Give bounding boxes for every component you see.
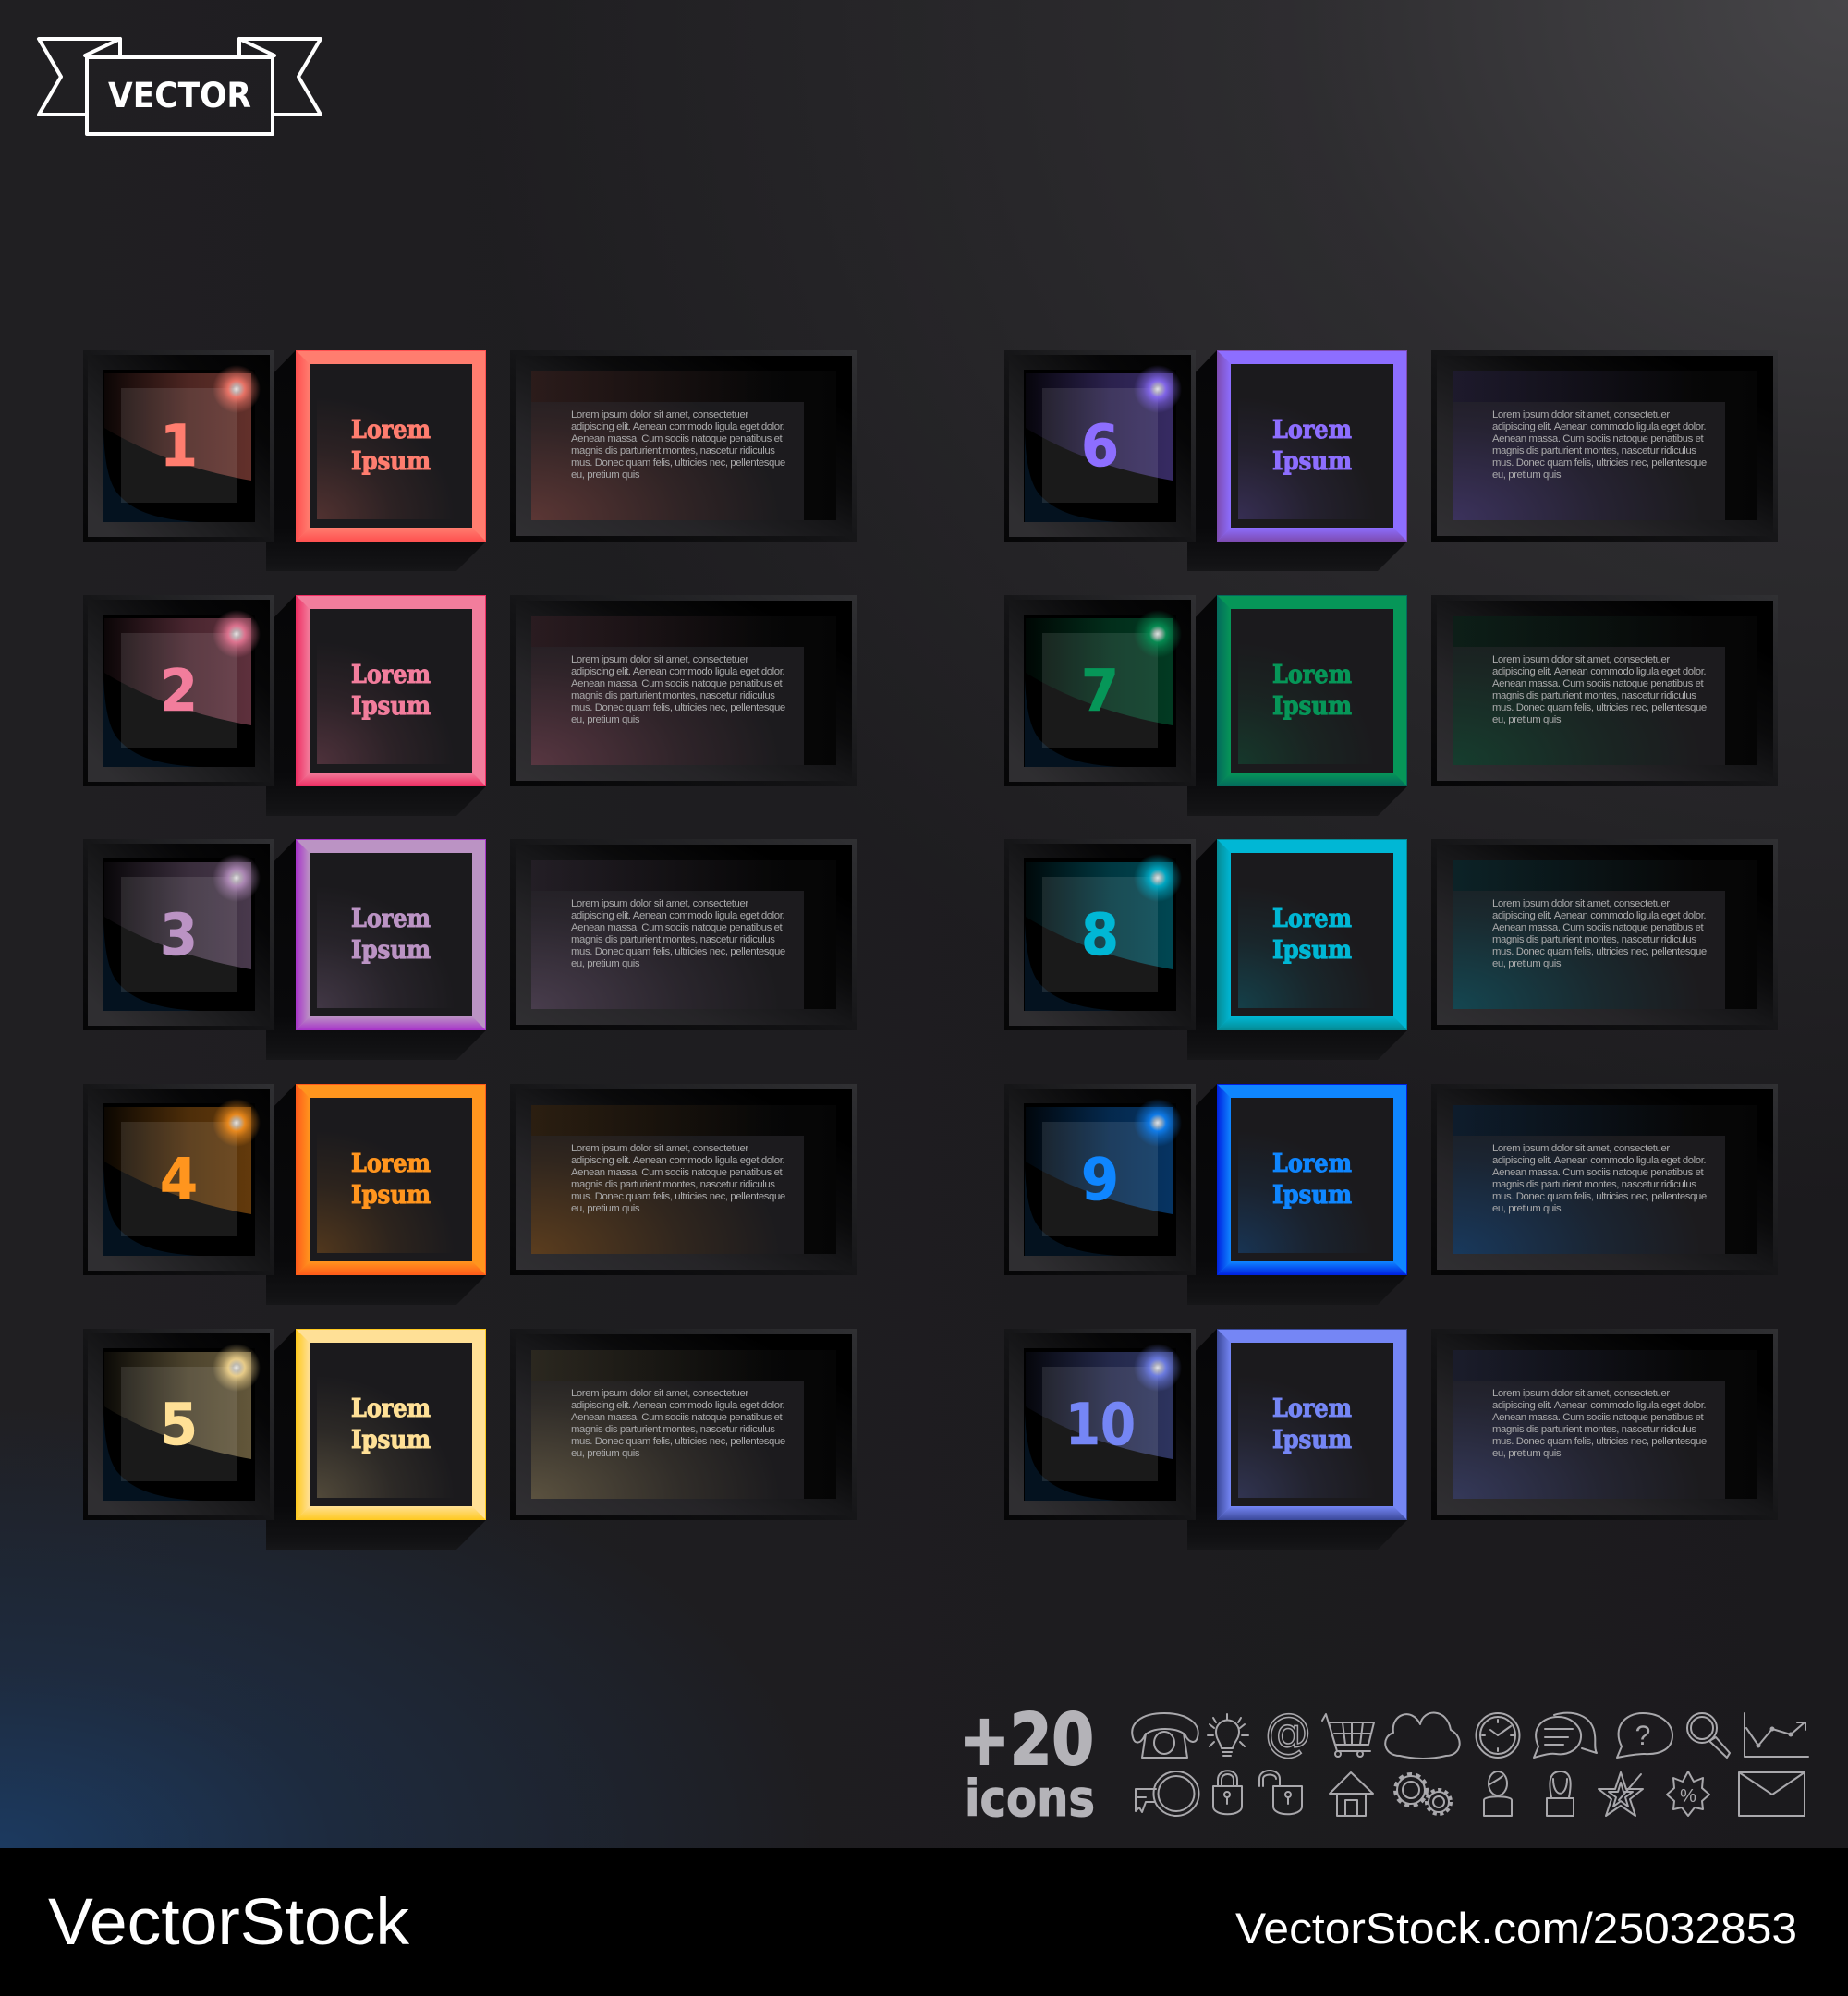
title frame 8 xyxy=(1217,839,1407,1030)
title frame 9: Lorem xyxy=(1272,1150,1352,1178)
title frame 3: Lorem xyxy=(351,905,431,933)
text panel 8: mus. Donec quam felis, ultricies nec, pellentesque xyxy=(1492,946,1707,957)
text panel 7: eu, pretium quis xyxy=(1492,714,1561,725)
icon: cloud xyxy=(1385,1713,1460,1759)
text panel 1: eu, pretium quis xyxy=(571,469,639,481)
text panel 4: Aenean massa. Cum sociis natoque penatibus et xyxy=(571,1167,782,1178)
text panel 6: eu, pretium quis xyxy=(1492,469,1561,481)
text panel 7: adipiscing elit. Aenean commodo ligula eget dolor. xyxy=(1492,666,1706,677)
text panel 2: Aenean massa. Cum sociis natoque penatibus et xyxy=(571,678,782,689)
icon: line chart xyxy=(1745,1713,1808,1757)
number tile 3: 3 xyxy=(160,901,198,968)
text panel 10: mus. Donec quam felis, ultricies nec, pellentesque xyxy=(1492,1436,1707,1447)
text panel 9: mus. Donec quam felis, ultricies nec, pellentesque xyxy=(1492,1191,1707,1202)
row 1: item 1 xyxy=(83,350,857,571)
title frame 2 xyxy=(296,595,486,786)
title frame 5: Ipsum xyxy=(351,1426,431,1454)
text panel 5: adipiscing elit. Aenean commodo ligula eget dolor. xyxy=(571,1400,784,1411)
text panel 10: eu, pretium quis xyxy=(1492,1448,1561,1459)
icon: gears xyxy=(1395,1774,1451,1814)
text panel 9: adipiscing elit. Aenean commodo ligula eget dolor. xyxy=(1492,1155,1706,1166)
title frame 3 xyxy=(296,839,486,1030)
number tile 2: 2 xyxy=(160,657,198,724)
icon: closed padlock xyxy=(1213,1771,1242,1814)
number tile 5: 5 xyxy=(160,1391,198,1458)
text panel 6: Lorem ipsum dolor sit amet, consectetuer xyxy=(1492,409,1670,420)
text panel 8 xyxy=(1431,839,1778,1030)
icon: woman xyxy=(1547,1771,1574,1816)
number tile 1 xyxy=(83,350,274,542)
text panel 4: Lorem ipsum dolor sit amet, consectetuer xyxy=(571,1143,748,1154)
logo: vector ribbon xyxy=(37,37,323,136)
text panel 8: magnis dis parturient montes, nascetur ridiculus xyxy=(1492,934,1696,945)
text panel 6 xyxy=(1431,350,1778,542)
row 8: item 8 xyxy=(1004,839,1778,1060)
text panel 2: eu, pretium quis xyxy=(571,714,639,725)
title frame 10: Ipsum xyxy=(1272,1426,1352,1454)
text panel 5: eu, pretium quis xyxy=(571,1448,639,1459)
text panel 1: mus. Donec quam felis, ultricies nec, pellentesque xyxy=(571,457,785,469)
text panel 10: adipiscing elit. Aenean commodo ligula eget dolor. xyxy=(1492,1400,1706,1411)
icon: at sign: @ xyxy=(1265,1703,1311,1761)
number tile 8: 8 xyxy=(1081,901,1119,968)
text panel 5 xyxy=(510,1329,857,1520)
row 3: item 3 xyxy=(83,839,857,1060)
heading: +20 icons: +20 xyxy=(959,1699,1094,1782)
number tile 4 xyxy=(83,1084,274,1275)
title frame 9: Ipsum xyxy=(1272,1181,1352,1210)
text panel 2: adipiscing elit. Aenean commodo ligula eget dolor. xyxy=(571,666,784,677)
text panel 8: Lorem ipsum dolor sit amet, consectetuer xyxy=(1492,898,1670,909)
title frame 2: Ipsum xyxy=(351,692,431,721)
number tile 5 xyxy=(83,1329,274,1520)
number tile 10: 10 xyxy=(1065,1391,1136,1458)
number tile 8 xyxy=(1004,839,1196,1030)
title frame 4 xyxy=(296,1084,486,1275)
icon: chat bubbles xyxy=(1534,1713,1597,1758)
footer url: VectorStock.com/25032853 xyxy=(1235,1904,1797,1953)
row 6: item 6 xyxy=(1004,350,1778,571)
text panel 3: mus. Donec quam felis, ultricies nec, pellentesque xyxy=(571,946,785,957)
text panel 2: magnis dis parturient montes, nascetur ridiculus xyxy=(571,690,775,701)
footer bar xyxy=(0,1848,1848,1996)
text panel 6: magnis dis parturient montes, nascetur ridiculus xyxy=(1492,445,1696,456)
row 5: item 5 xyxy=(83,1329,857,1550)
text panel 4: adipiscing elit. Aenean commodo ligula eget dolor. xyxy=(571,1155,784,1166)
title frame 8: Lorem xyxy=(1272,905,1352,933)
title frame 10: Lorem xyxy=(1272,1394,1352,1423)
title frame 6: Lorem xyxy=(1272,416,1352,444)
text panel 3: adipiscing elit. Aenean commodo ligula eget dolor. xyxy=(571,910,784,921)
row 2: item 2 xyxy=(83,595,857,816)
text panel 7: mus. Donec quam felis, ultricies nec, pellentesque xyxy=(1492,702,1707,713)
text panel 5: mus. Donec quam felis, ultricies nec, pellentesque xyxy=(571,1436,785,1447)
text panel 4 xyxy=(510,1084,857,1275)
text panel 8: adipiscing elit. Aenean commodo ligula eget dolor. xyxy=(1492,910,1706,921)
text panel 4: mus. Donec quam felis, ultricies nec, pellentesque xyxy=(571,1191,785,1202)
text panel 9 xyxy=(1431,1084,1778,1275)
heading: +20 icons: icons xyxy=(965,1770,1095,1828)
text panel 9: eu, pretium quis xyxy=(1492,1203,1561,1214)
title frame 6 xyxy=(1217,350,1407,542)
title frame 8: Ipsum xyxy=(1272,936,1352,965)
text panel 2: Lorem ipsum dolor sit amet, consectetuer xyxy=(571,654,748,665)
text panel 10: magnis dis parturient montes, nascetur ridiculus xyxy=(1492,1424,1696,1435)
text panel 7: Aenean massa. Cum sociis natoque penatibus et xyxy=(1492,678,1703,689)
icon: telephone xyxy=(1132,1713,1198,1758)
text panel 2 xyxy=(510,595,857,786)
title frame 5 xyxy=(296,1329,486,1520)
text panel 10: Lorem ipsum dolor sit amet, consectetuer xyxy=(1492,1388,1670,1399)
text panel 1: Lorem ipsum dolor sit amet, consectetuer xyxy=(571,409,748,420)
text panel 3: magnis dis parturient montes, nascetur ridiculus xyxy=(571,934,775,945)
text panel 6: Aenean massa. Cum sociis natoque penatibus et xyxy=(1492,433,1703,444)
icon: light bulb xyxy=(1208,1714,1248,1756)
logo: vector ribbon: VECTOR xyxy=(108,76,251,116)
icon: question bubble xyxy=(1617,1713,1672,1758)
number tile 6: 6 xyxy=(1081,412,1119,480)
title frame 1: Lorem xyxy=(351,416,431,444)
text panel 10 xyxy=(1431,1329,1778,1520)
number tile 1: 1 xyxy=(160,412,198,480)
text panel 10: Aenean massa. Cum sociis natoque penatibus et xyxy=(1492,1412,1703,1423)
row 10: item 10 xyxy=(1004,1329,1778,1547)
icon: man xyxy=(1484,1771,1512,1816)
icon: house xyxy=(1330,1772,1373,1816)
icon: magnifier xyxy=(1687,1713,1730,1758)
row 7: item 7 xyxy=(1004,595,1778,816)
title frame 7: Lorem xyxy=(1272,661,1352,689)
heading: +20 icons xyxy=(959,1699,1095,1828)
text panel 1 xyxy=(510,350,857,542)
icon: envelope xyxy=(1739,1772,1805,1816)
text panel 3: eu, pretium quis xyxy=(571,958,639,969)
number tile 10 xyxy=(1004,1329,1196,1520)
number tile 7 xyxy=(1004,595,1196,786)
text panel 7 xyxy=(1431,595,1778,786)
text panel 1: Aenean massa. Cum sociis natoque penatibus et xyxy=(571,433,782,444)
title frame 9 xyxy=(1217,1084,1407,1275)
text panel 5: Aenean massa. Cum sociis natoque penatibus et xyxy=(571,1412,782,1423)
icon: question mark: ? xyxy=(1635,1721,1650,1751)
icon: clock xyxy=(1477,1713,1519,1758)
title frame 6: Ipsum xyxy=(1272,447,1352,476)
icon: shopping cart xyxy=(1322,1714,1374,1757)
icon: open padlock xyxy=(1259,1771,1302,1814)
text panel 9: magnis dis parturient montes, nascetur ridiculus xyxy=(1492,1179,1696,1190)
number tile 9: 9 xyxy=(1081,1146,1119,1213)
text panel 3: Lorem ipsum dolor sit amet, consectetuer xyxy=(571,898,748,909)
text panel 5: magnis dis parturient montes, nascetur ridiculus xyxy=(571,1424,775,1435)
row 4: item 4 xyxy=(83,1084,857,1305)
text panel 6: adipiscing elit. Aenean commodo ligula eget dolor. xyxy=(1492,421,1706,432)
number tile 9 xyxy=(1004,1084,1196,1275)
text panel 6: mus. Donec quam felis, ultricies nec, pellentesque xyxy=(1492,457,1707,469)
text panel 3 xyxy=(510,839,857,1030)
text panel 5: Lorem ipsum dolor sit amet, consectetuer xyxy=(571,1388,748,1399)
row 9: item 9 xyxy=(1004,1084,1778,1302)
text panel 9: Lorem ipsum dolor sit amet, consectetuer xyxy=(1492,1143,1670,1154)
number tile 2 xyxy=(83,595,274,786)
number tile 3 xyxy=(83,839,274,1030)
title frame 4: Lorem xyxy=(351,1150,431,1178)
title frame 7 xyxy=(1217,595,1407,786)
icon: star with check xyxy=(1599,1772,1643,1816)
icon: discount badge xyxy=(1667,1771,1709,1816)
title frame 2: Lorem xyxy=(351,661,431,689)
footer brand: VectorStock xyxy=(48,1886,410,1959)
text panel 1: adipiscing elit. Aenean commodo ligula eget dolor. xyxy=(571,421,784,432)
title frame 5: Lorem xyxy=(351,1394,431,1423)
icon: percent sign: % xyxy=(1680,1786,1696,1807)
text panel 3: Aenean massa. Cum sociis natoque penatibus et xyxy=(571,922,782,933)
title frame 3: Ipsum xyxy=(351,936,431,965)
title frame 10 xyxy=(1217,1329,1407,1520)
text panel 7: Lorem ipsum dolor sit amet, consectetuer xyxy=(1492,654,1670,665)
text panel 8: Aenean massa. Cum sociis natoque penatibus et xyxy=(1492,922,1703,933)
text panel 9: Aenean massa. Cum sociis natoque penatibus et xyxy=(1492,1167,1703,1178)
title frame 4: Ipsum xyxy=(351,1181,431,1210)
text panel 4: eu, pretium quis xyxy=(571,1203,639,1214)
number tile 7: 7 xyxy=(1081,657,1119,724)
number tile 6 xyxy=(1004,350,1196,542)
title frame 1: Ipsum xyxy=(351,447,431,476)
text panel 1: magnis dis parturient montes, nascetur ridiculus xyxy=(571,445,775,456)
icon: ring with tag xyxy=(1136,1771,1199,1816)
title frame 7: Ipsum xyxy=(1272,692,1352,721)
text panel 4: magnis dis parturient montes, nascetur ridiculus xyxy=(571,1179,775,1190)
text panel 7: magnis dis parturient montes, nascetur ridiculus xyxy=(1492,690,1696,701)
title frame 1 xyxy=(296,350,486,542)
text panel 8: eu, pretium quis xyxy=(1492,958,1561,969)
text panel 2: mus. Donec quam felis, ultricies nec, pellentesque xyxy=(571,702,785,713)
number tile 4: 4 xyxy=(160,1146,198,1213)
